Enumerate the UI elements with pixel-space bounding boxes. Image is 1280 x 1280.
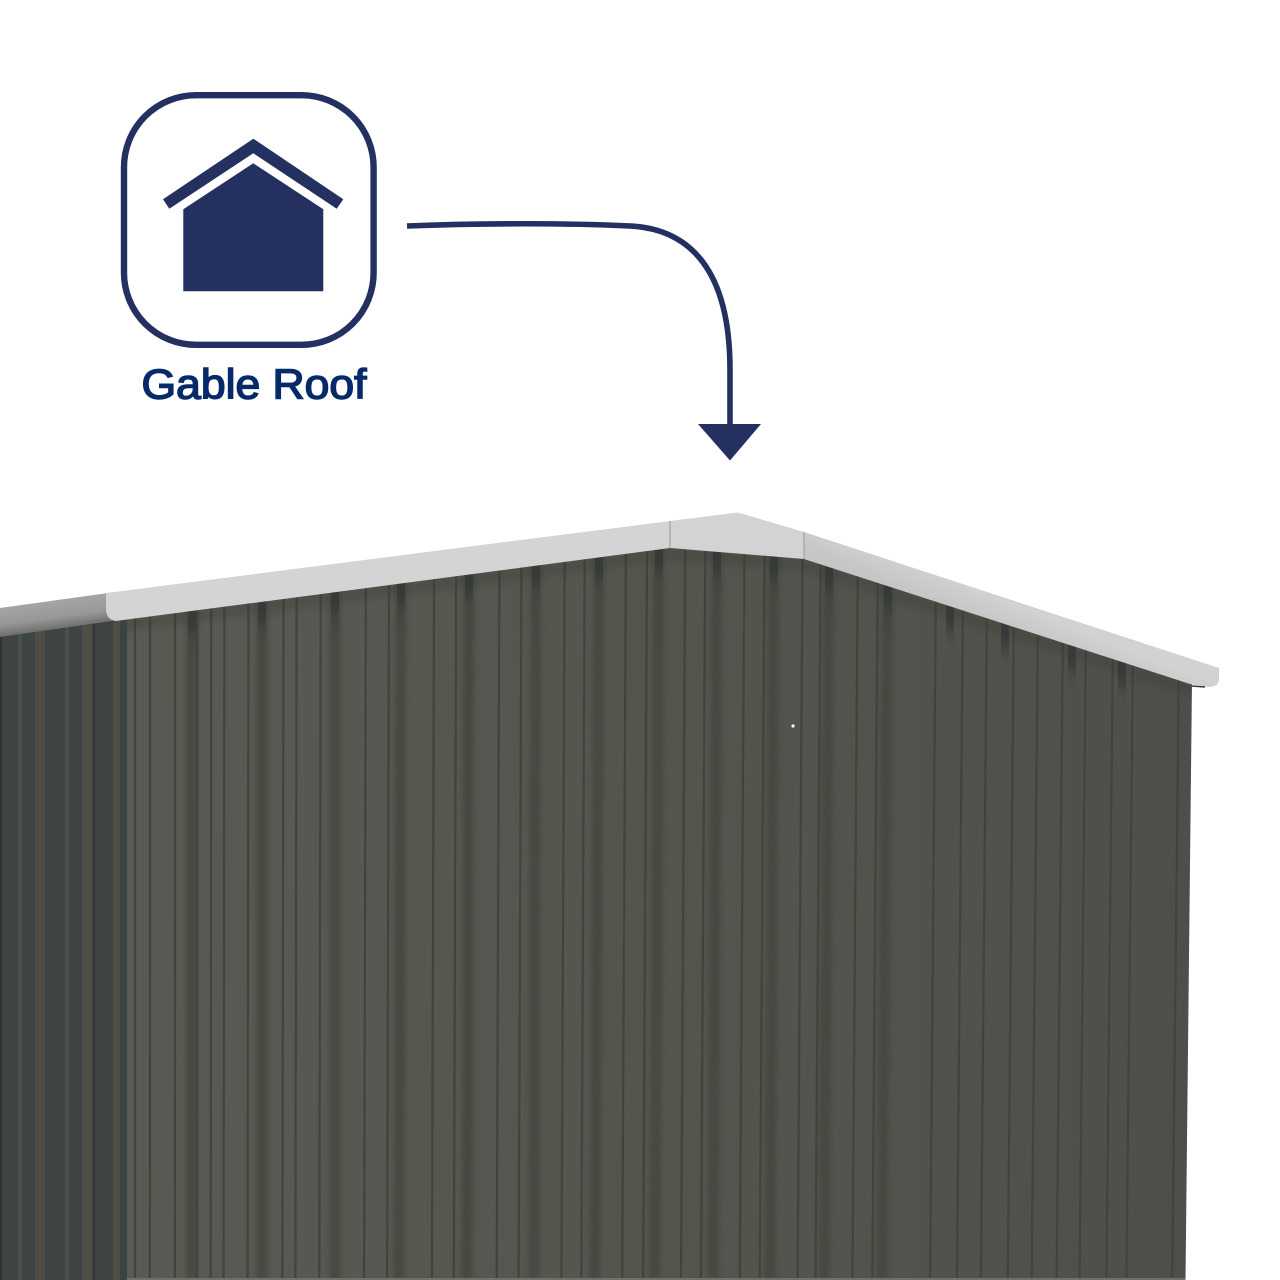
trim underside shadow: [1192, 686, 1205, 687]
rib seam lines: [135, 540, 1180, 1280]
shadow under roof trim: [115, 554, 1195, 692]
icon: gable roof house badge: [124, 95, 374, 345]
side roof eave: [0, 593, 112, 637]
house body: [183, 163, 323, 291]
gable roof trim: [106, 512, 1219, 687]
soft rib shadows: [192, 540, 888, 1280]
trim: left slope: [106, 521, 670, 621]
label: Gable Roof: Gable Roof: [142, 360, 367, 408]
side wall of shed: [0, 616, 127, 1280]
trim: ridge cap: [670, 512, 804, 559]
dark rib tips under the trim: [188, 549, 1126, 692]
bottom edge highlight: [127, 1278, 1197, 1280]
screw hole dot: [791, 724, 795, 728]
house roof: [163, 139, 343, 209]
trim seams: [670, 521, 804, 559]
trim: right slope: [804, 532, 1219, 687]
badge outline: [124, 95, 374, 345]
gable end wall with corrugated ribs: [115, 530, 1197, 1280]
arrow pointing to roof: [407, 224, 761, 460]
